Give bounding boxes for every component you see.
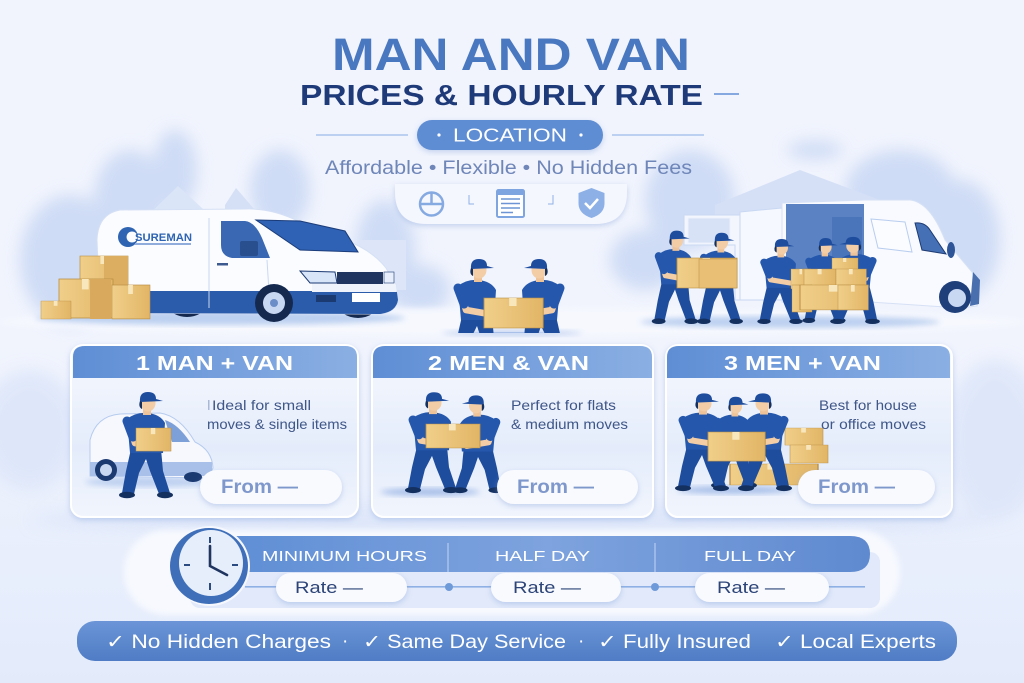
- card description: Best for house: [819, 397, 917, 413]
- card description: & medium moves: [511, 416, 628, 432]
- background scenery: trees and houses: [0, 130, 1024, 336]
- card description: [819, 397, 926, 432]
- footer benefits bar: ✓ Same Day Service: [363, 632, 566, 653]
- rate pill: half day: Rate —: [513, 578, 581, 597]
- van body: [97, 209, 398, 314]
- heading accent line: [714, 93, 739, 95]
- icon: calendar checklist: [497, 190, 524, 217]
- location pill: LOCATION: [453, 126, 567, 146]
- movers with box: [675, 393, 792, 491]
- title: MAN AND VAN: [332, 29, 690, 80]
- box stack: [791, 258, 868, 312]
- rate header bar: HALF DAY: [495, 548, 590, 565]
- background boxes: [730, 428, 828, 485]
- location pill: [316, 120, 704, 150]
- panel: 3 men + van: [666, 345, 952, 517]
- card description: [511, 397, 628, 432]
- rate header bar: FULL DAY: [704, 548, 796, 565]
- card description: moves & single items: [207, 416, 347, 432]
- footer benefits bar: [77, 621, 957, 661]
- panel: 1 man + van: [71, 345, 358, 517]
- card description: Ideal for small: [212, 397, 311, 413]
- price pill: [497, 470, 638, 504]
- footer benefits bar: ✓ Fully Insured: [598, 632, 751, 653]
- card header: [667, 346, 950, 378]
- center pair of movers: [454, 259, 564, 333]
- footer benefits bar: ✓ No Hidden Charges: [106, 632, 331, 653]
- card description: Perfect for flats: [511, 397, 616, 413]
- icon: shield: [578, 188, 604, 218]
- lower scenery wash: [0, 360, 1024, 536]
- footer benefits bar: ✓ Local Experts: [775, 632, 936, 653]
- rate pill: minimum hours: Rate —: [295, 578, 363, 597]
- van front details: [300, 271, 337, 283]
- rate header bar: MINIMUM HOURS: [262, 548, 427, 565]
- panel: 2 men & van: [372, 345, 653, 517]
- icon: wall clock: [170, 526, 250, 606]
- panel: hourly rates band: [124, 526, 900, 615]
- rate pill: half day: [491, 573, 621, 602]
- subtitle heading: PRICES & HOURLY RATE: [300, 80, 703, 112]
- van windows: [221, 221, 270, 258]
- van front wheel: [255, 284, 293, 322]
- price pill: From —: [517, 477, 594, 498]
- connector line and dots: [245, 583, 865, 591]
- card header: [73, 346, 357, 378]
- background van: [684, 215, 745, 300]
- van body: [782, 200, 979, 308]
- price pill: From —: [221, 477, 298, 498]
- price pill: From —: [818, 477, 895, 498]
- van wheel: [939, 281, 971, 313]
- card description: [207, 397, 347, 432]
- card header: [373, 346, 652, 378]
- van windows: [871, 219, 912, 252]
- rate pill: minimum hours: [276, 573, 407, 602]
- mover with box: [119, 392, 173, 498]
- van logo: [118, 227, 192, 247]
- movers: [652, 231, 698, 324]
- rate header bar: [225, 536, 870, 572]
- van logo: SUREMAN: [135, 232, 192, 244]
- footer benefits bar: ·: [342, 631, 348, 652]
- card description: or office moves: [821, 416, 926, 432]
- footer benefits bar: ·: [578, 631, 584, 652]
- icon: clock: [420, 192, 443, 216]
- right van and crew: [652, 200, 980, 324]
- price pill: [798, 470, 935, 504]
- stacked boxes: [41, 256, 150, 319]
- card header: 2 MEN & VAN: [428, 353, 589, 375]
- icon tray: [395, 184, 627, 224]
- small van: [85, 413, 215, 487]
- rate pill: full day: Rate —: [717, 578, 785, 597]
- card header: 1 MAN + VAN: [136, 353, 293, 375]
- van rear wheel: [169, 295, 205, 317]
- rate pill: full day: [695, 573, 829, 602]
- price pill: [200, 470, 342, 504]
- movers with box: [405, 392, 504, 493]
- open cargo door: [786, 204, 864, 292]
- left van illustration: [41, 209, 410, 322]
- card header: 3 MEN + VAN: [724, 353, 881, 375]
- tagline: Affordable • Flexible • No Hidden Fees: [325, 158, 692, 179]
